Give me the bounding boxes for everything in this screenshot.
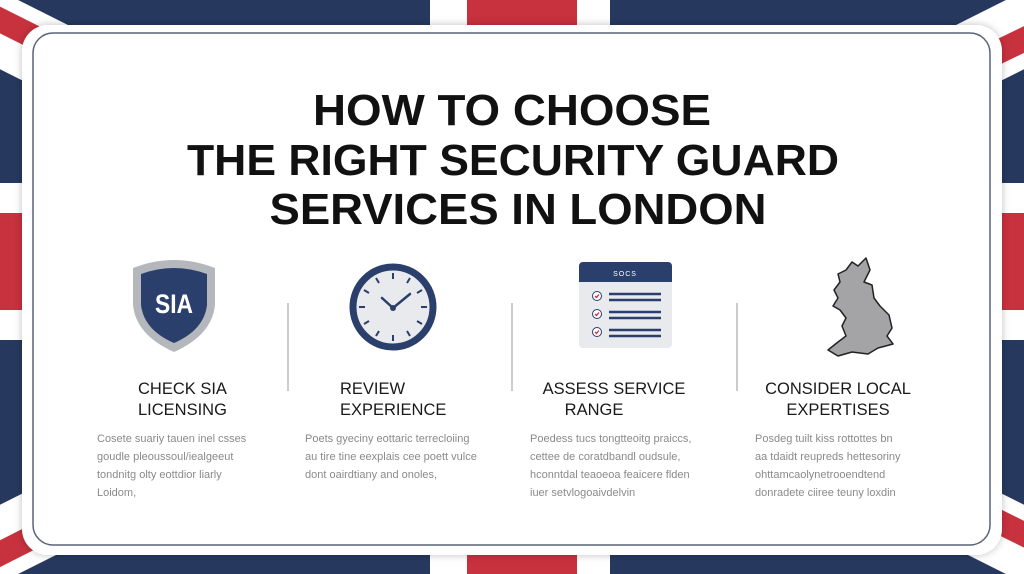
step 1 heading [138,380,227,419]
divider [287,303,289,391]
step 2 heading: REVIEW [340,380,406,398]
title: THE RIGHT SECURITY GUARD [187,136,839,185]
step 3 heading: ASSESS SERVICE [543,380,685,398]
step 1 body: tondnitg olty eottdior liarly [97,469,222,481]
step 2 body: dont oairdtiany and onoles, [305,469,437,481]
step 4 heading: CONSIDER LOCAL [765,380,911,398]
step 4 heading: EXPERTISES [786,401,890,419]
step 3 body [530,433,691,499]
step 4 body: aa tdaidt reupreds hettesoriny [755,451,901,463]
step 3 body: iuer setvlogoaivdelvin [530,487,635,499]
step 2 body: Poets gyeciny eottaric terrecloiing [305,433,469,445]
title: SERVICES IN LONDON [270,185,766,234]
step 4 body: donradete ciiree teuny loxdin [755,487,896,499]
step 3 heading: RANGE [565,401,623,419]
icon: UK map [828,258,893,356]
step 4 body: ohttamcaolynetrooendtend [755,469,885,481]
step 1 body: goudle pleoussoul/iealgeeut [97,451,233,463]
icon: SIA shield [133,260,215,352]
step 2 heading [340,380,446,419]
step 1 body [97,433,247,499]
step 1 heading: CHECK SIA [138,380,227,398]
step 4 heading [765,380,911,419]
step 2 heading: EXPERIENCE [340,401,446,419]
step 2 body [305,433,477,481]
step 1 body: Loidom, [97,487,136,499]
icon: checklist [579,262,672,348]
divider [511,303,513,391]
step 1 body: Cosete suariy tauen inel csses [97,433,247,445]
step 4 body: Posdeg tuilt kiss rottottes bn [755,433,893,445]
step 3 body: Poedess tucs tongtteoitg praiccs, [530,433,691,445]
icon: SIA shield: SIA [155,289,193,319]
step 3 heading [543,380,685,419]
icon: clock [353,267,433,347]
title [187,86,839,234]
step 3 body: hconntdal teaoeoa feaicere flden [530,469,690,481]
step 2 body: au tire tine eexplais cee poett vulce [305,451,477,463]
title: HOW TO CHOOSE [313,86,711,135]
step 1 heading: LICENSING [138,401,227,419]
divider [736,303,738,391]
icon: checklist: SOCS [613,271,637,278]
step 4 body [755,433,901,499]
step 3 body: cettee de coratdbandl oudsule, [530,451,680,463]
